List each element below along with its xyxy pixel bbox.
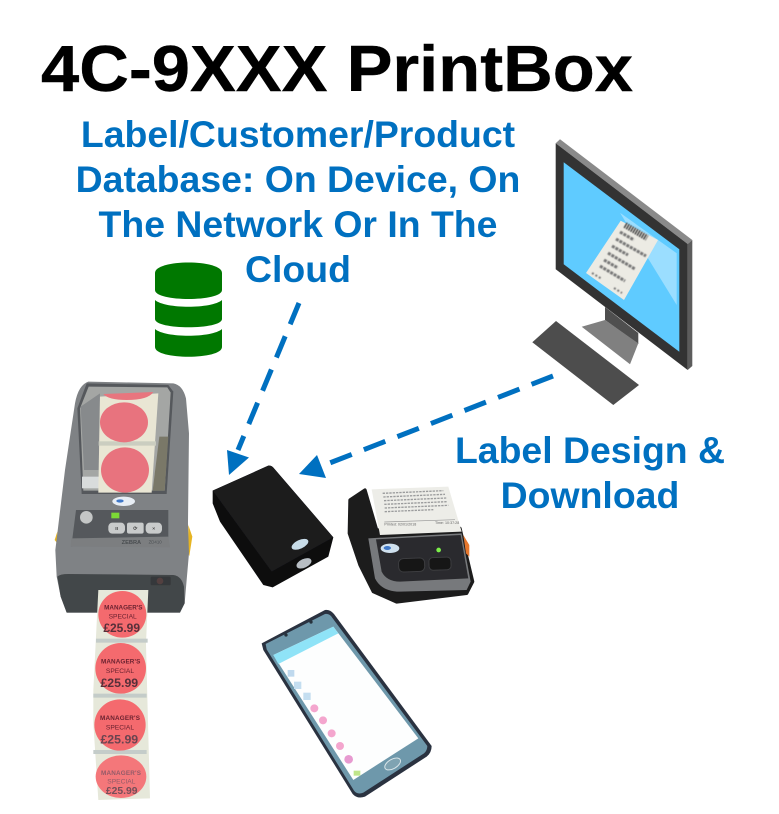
label roll: SPECIAL [106, 668, 134, 675]
label printer: × [152, 526, 155, 532]
label roll: SPECIAL [109, 614, 137, 621]
text block: label design caption: Download [501, 474, 679, 516]
label printer [55, 382, 192, 613]
label roll: £25.99 [103, 621, 140, 635]
label printer: ZEBRA [122, 540, 141, 546]
logo badge [112, 497, 135, 506]
label printer: II [115, 526, 119, 532]
smartphone [262, 610, 432, 798]
icon: database [155, 262, 222, 357]
logo badges [290, 537, 310, 552]
label roll: SPECIAL [107, 779, 136, 786]
text block: database caption: Database: On Device, On [76, 158, 520, 200]
mobile receipt printer: Printed: 02/01/2018 [384, 522, 416, 526]
arrow: database to device [227, 303, 299, 475]
mobile receipt printer: Time: 10:37:28 [435, 521, 459, 525]
text block: database caption [76, 113, 520, 290]
title: 4C-9XXX PrintBox [41, 32, 633, 105]
label roll: MANAGER'S [101, 658, 140, 665]
lid window [77, 383, 173, 494]
label roll [93, 590, 150, 800]
text block: label design caption [455, 429, 725, 516]
arrow: computer to device [299, 376, 553, 478]
label roll: MANAGER'S [104, 605, 142, 612]
label roll: £25.99 [106, 786, 138, 797]
text block: database caption: Label/Customer/Product [81, 113, 515, 155]
label printer: ZD410 [149, 540, 162, 545]
label printer: ⟳ [133, 526, 138, 532]
text block: database caption: Cloud [245, 248, 351, 290]
label roll: MANAGER'S [101, 770, 141, 777]
app list icons [288, 670, 360, 776]
front lower housing [57, 574, 185, 613]
label roll: MANAGER'S [100, 715, 140, 722]
icon: desktop computer [532, 139, 692, 405]
label roll: £25.99 [100, 676, 138, 690]
print box device [213, 466, 333, 587]
text block: database caption: The Network Or In The [99, 203, 497, 245]
label roll: SPECIAL [106, 725, 134, 732]
printer body [55, 382, 189, 613]
text block: label design caption: Label Design & [455, 429, 725, 471]
control panel [71, 510, 168, 547]
yellow side clips [55, 525, 192, 556]
label roll: £25.99 [100, 733, 138, 747]
mobile receipt printer [349, 487, 473, 602]
